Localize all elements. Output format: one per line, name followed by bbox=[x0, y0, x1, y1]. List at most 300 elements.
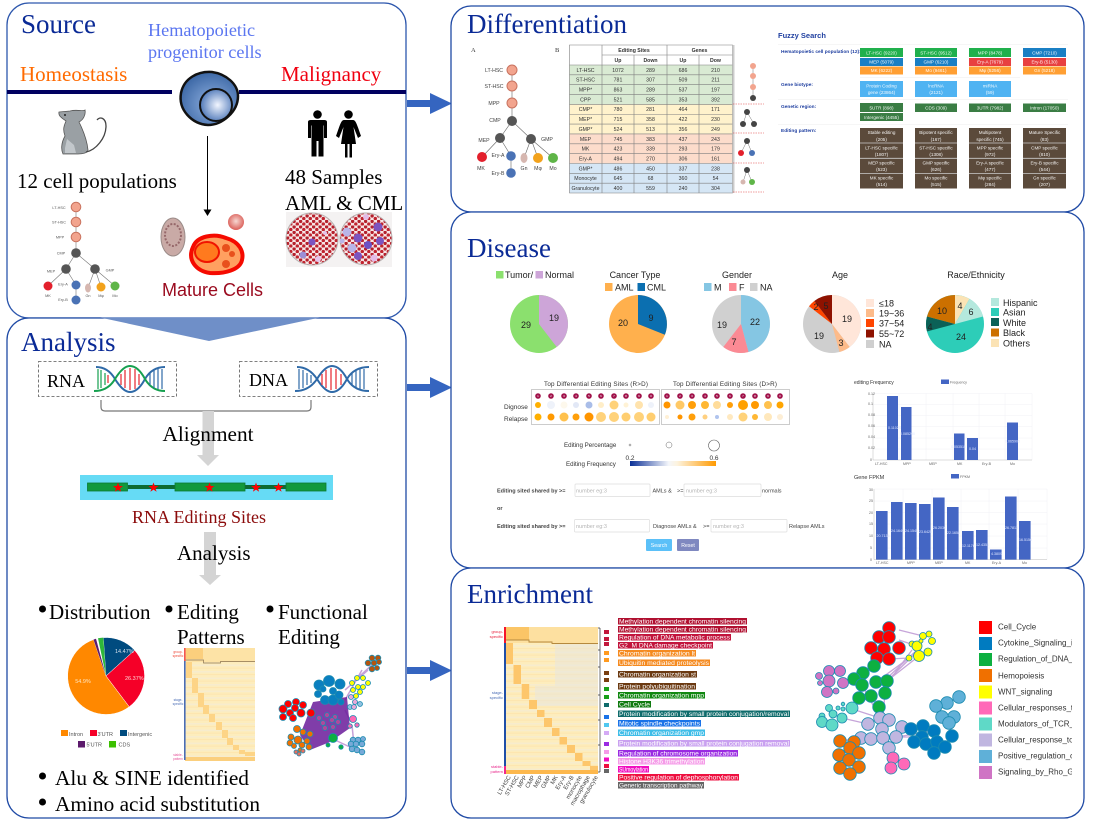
table: editing sites and genes: 509 bbox=[679, 78, 687, 84]
table: editing sites and genes: LT-HSC bbox=[576, 68, 595, 74]
diagram: cell tree: MK bbox=[45, 294, 51, 298]
table: editing sites and genes: CMP* bbox=[579, 107, 592, 113]
diagram: differentiation tree: Ery-A bbox=[492, 153, 505, 159]
chart: editing frequency bars: MEP bbox=[929, 462, 937, 466]
chart: editing frequency bars: 0.11028 bbox=[888, 426, 901, 430]
table: editing sites and genes: 293 bbox=[679, 147, 687, 153]
bracket: merge RNA and DNA bbox=[101, 400, 311, 411]
table: editing sites and genes: 715 bbox=[614, 117, 622, 123]
site number markers: 0 bbox=[650, 394, 652, 398]
table: editing sites and genes: CPP bbox=[580, 97, 591, 103]
table: editing sites and genes: 281 bbox=[646, 107, 655, 113]
table: editing sites and genes: MEP* bbox=[579, 117, 592, 123]
chart: editing pattern heatmap: pattern bbox=[173, 757, 183, 761]
table: editing sites and genes: 400 bbox=[614, 186, 622, 192]
chart: editing frequency bars bbox=[854, 380, 1032, 466]
buttons: cell population bbox=[860, 48, 1066, 74]
diagram: differentiation tree: GMP bbox=[541, 137, 553, 143]
label: hematopoietic progenitor cells: Hematopoietic bbox=[148, 20, 255, 40]
axis labels: cell populations: monocyte bbox=[566, 774, 584, 801]
arrow: to enrichment bbox=[407, 660, 452, 681]
table: editing sites and genes: 179 bbox=[711, 147, 720, 153]
chart: top differential editing sites bubbles: Top Differential Editing Sites (D>R) bbox=[673, 381, 777, 388]
enriched term labels: Cell Cycle bbox=[619, 702, 651, 709]
diagram: lineage mini trees bbox=[733, 63, 764, 192]
chart: gene FPKM bars: 30 bbox=[869, 488, 873, 492]
table: editing sites and genes: 356 bbox=[679, 127, 687, 133]
box: DNA bbox=[240, 362, 378, 396]
site number markers: 0 bbox=[779, 394, 781, 398]
panel: differentiation bbox=[451, 6, 1084, 212]
legend: gender: F bbox=[739, 282, 745, 292]
buttons: editing pattern: (626) bbox=[931, 167, 942, 172]
chart: gene FPKM bars: 25 bbox=[869, 499, 873, 503]
icon: blood smears bbox=[286, 212, 392, 267]
chart: gene FPKM bars: 5 bbox=[870, 546, 872, 550]
buttons: editing pattern: (810) bbox=[1039, 152, 1050, 157]
chart: tumor normal pie bbox=[510, 295, 568, 353]
table: editing sites and genes: Dow bbox=[710, 58, 722, 64]
axis labels: cell populations: macrophage bbox=[570, 774, 592, 807]
diagram: cell tree: GMP bbox=[106, 268, 115, 272]
section: fuzzy search: Gene biotype: bbox=[781, 82, 813, 88]
diagram: cell tree: Ery-A bbox=[58, 282, 68, 286]
axis labels: cell populations: ST-HSC bbox=[505, 774, 521, 797]
legend: cancer type bbox=[605, 270, 666, 292]
table: editing sites and genes: 353 bbox=[679, 97, 687, 103]
buttons: editing pattern: (544) bbox=[1039, 167, 1050, 172]
buttons: gene biotype: lncRNA bbox=[928, 84, 945, 88]
chart: gender pie: 7 bbox=[731, 337, 737, 347]
buttons: gene biotype: gene (23864) bbox=[868, 90, 896, 95]
enriched term labels: Protein polyubiquitination bbox=[619, 684, 696, 691]
buttons: cell population: MK (6222) bbox=[871, 68, 893, 73]
label: A: A bbox=[471, 47, 476, 54]
site number markers: 7 bbox=[613, 394, 615, 398]
legend: race ethnicity: Race/Ethnicity bbox=[947, 270, 1005, 280]
form: shared editing sites filter: Editing sited shared by >= bbox=[497, 488, 565, 494]
table: editing sites and genes: 54 bbox=[713, 176, 718, 182]
arrow: analysis bbox=[199, 532, 221, 585]
table: editing sites and genes: 513 bbox=[646, 127, 655, 133]
label: malignancy: Malignancy bbox=[281, 62, 382, 86]
enriched term labels: Methylation dependent chromatin silencing bbox=[619, 627, 747, 634]
buttons: gene biotype: miRNA bbox=[983, 84, 998, 88]
site number markers: 4 bbox=[704, 394, 706, 398]
buttons: genetic region: CDS (309) bbox=[925, 106, 947, 110]
chart: gene FPKM bars: FPKM bbox=[960, 475, 970, 479]
buttons: cell population: ST-HSC (9512) bbox=[920, 50, 952, 56]
enriched term labels bbox=[618, 618, 790, 790]
divider: timeline right bbox=[239, 90, 406, 94]
table: editing sites and genes: Editing Sites bbox=[618, 48, 650, 54]
panel: disease bbox=[451, 212, 1084, 568]
chart: gene FPKM bars: 12.1176 bbox=[962, 544, 975, 548]
icon: mouse bbox=[59, 110, 106, 154]
chart: genomic distribution pie: 26.37% bbox=[125, 676, 144, 682]
chart: gene FPKM bars: Mo bbox=[1022, 561, 1027, 565]
form: shared editing sites filter: Relapse AMLs bbox=[789, 524, 825, 530]
diagram: cell tree: CMP bbox=[57, 252, 66, 256]
chart: gene FPKM bars bbox=[854, 474, 1047, 565]
buttons: cell population: Mφ (5256) bbox=[979, 68, 1001, 73]
chart: gene FPKM bars: MPP bbox=[907, 561, 915, 565]
legend: cancer type: AML bbox=[615, 282, 634, 292]
table: editing sites and genes: 486 bbox=[614, 166, 622, 172]
buttons: editing pattern: (284) bbox=[985, 182, 996, 187]
chart: cancer type pie bbox=[609, 295, 667, 353]
legend: editing percentage and frequency: 0.2 bbox=[625, 455, 635, 462]
buttons: editing pattern: (477) bbox=[985, 167, 996, 172]
chart: editing frequency bars: Frequency bbox=[950, 380, 967, 384]
enriched term labels: Positive regulation of dephosphorylation bbox=[619, 775, 739, 782]
chart: gene FPKM bars: 23.6425 bbox=[919, 530, 932, 534]
chart: gene FPKM bars: Ery-A bbox=[992, 561, 1002, 565]
table: editing sites and genes: 780 bbox=[614, 107, 622, 113]
buttons: editing pattern: Gn specific bbox=[1033, 176, 1057, 180]
chart: gene FPKM bars: Gene FPKM bbox=[854, 475, 885, 481]
buttons: genetic region: Intergenic (4455) bbox=[864, 115, 899, 120]
site number markers: 8 bbox=[754, 394, 756, 398]
chart: editing frequency bars: 0.02 bbox=[868, 446, 875, 450]
site number markers: 4 bbox=[575, 394, 577, 398]
table: editing sites and genes: 645 bbox=[614, 176, 622, 182]
legend: editing percentage and frequency: Editing Percentage bbox=[564, 442, 617, 449]
icon: mature cells bbox=[161, 214, 244, 273]
chart: editing frequency bars: 0.04 bbox=[868, 435, 875, 439]
panel: source bbox=[7, 3, 406, 318]
chart: gene FPKM bars: 20 bbox=[869, 511, 873, 515]
chart: enrichment heatmap: group- bbox=[491, 629, 504, 634]
chart: editing frequency bars: 0.12 bbox=[868, 392, 875, 396]
buttons: editing pattern: (205) bbox=[876, 137, 887, 142]
legend: network clusters bbox=[979, 621, 1072, 779]
site number markers: 6 bbox=[729, 394, 731, 398]
enriched term labels: Regulation of chromosome organization bbox=[619, 751, 738, 758]
chart: top differential editing sites bubbles: Dignose bbox=[504, 404, 528, 411]
buttons: cell population: Ery-A (7679) bbox=[977, 60, 1003, 65]
buttons: genetic region: 3UTR (7982) bbox=[977, 106, 1004, 110]
chart: editing frequency bars: 0 bbox=[870, 458, 872, 462]
table: editing sites and genes: Up bbox=[615, 58, 621, 64]
table: editing sites and genes: Ery-A bbox=[579, 156, 593, 162]
table: editing sites and genes: 1072 bbox=[612, 68, 624, 74]
table: editing sites and genes: 464 bbox=[679, 107, 687, 113]
diagram: differentiation tree: CMP bbox=[489, 118, 501, 124]
table: editing sites and genes: 360 bbox=[679, 176, 687, 182]
site number markers: 9 bbox=[767, 394, 769, 398]
diagram: cell tree: Gn bbox=[85, 294, 91, 298]
enriched term labels: G2_M DNA damage checkpoint bbox=[619, 643, 712, 650]
chart: race ethnicity pie: 4 bbox=[927, 322, 933, 332]
form: shared editing sites filter: Editing sited shared by >= bbox=[497, 524, 565, 530]
label: alignment: Alignment bbox=[162, 422, 254, 446]
buttons: editing pattern: (83) bbox=[1040, 137, 1049, 142]
heading: disease: Disease bbox=[467, 233, 551, 263]
table: editing sites and genes: Granulocyte bbox=[572, 186, 600, 192]
heading: source: Source bbox=[21, 9, 96, 39]
legend: network clusters: Cell_Cycle bbox=[998, 622, 1037, 632]
item: distribution: Distribution bbox=[49, 600, 151, 624]
axis labels: cell populations: MPP bbox=[517, 775, 529, 789]
buttons: editing pattern: (167) bbox=[931, 137, 942, 142]
heading: analysis: Analysis bbox=[21, 327, 116, 357]
heading: differentiation: Differentiation bbox=[467, 9, 627, 39]
table: editing sites and genes: 383 bbox=[646, 137, 655, 143]
enriched term labels: Chromatin organization mpp bbox=[619, 693, 705, 700]
chart: editing frequency bars: 0.065905 bbox=[1005, 440, 1020, 444]
legend: age: NA bbox=[879, 340, 892, 350]
table: editing sites and genes: 304 bbox=[711, 186, 720, 192]
diagram: differentiation tree: MEP bbox=[478, 138, 490, 144]
legend: genomic regions bbox=[61, 730, 152, 748]
legend: genomic regions: 5'UTR bbox=[86, 742, 102, 748]
chart: editing pattern heatmap: group- bbox=[173, 650, 183, 654]
table: editing sites and genes: 494 bbox=[614, 156, 622, 162]
table: editing sites and genes: 781 bbox=[614, 78, 622, 84]
legend: race ethnicity bbox=[947, 270, 1038, 348]
chart: gene FPKM bars: 0 bbox=[870, 558, 872, 562]
chart: cancer type pie: 20 bbox=[618, 318, 628, 328]
site number markers: 2 bbox=[679, 394, 681, 398]
buttons: editing pattern: MPP specific bbox=[977, 146, 1004, 150]
table: editing sites and genes: MEP bbox=[580, 137, 592, 143]
legend: tumor normal bbox=[496, 270, 574, 280]
site number markers: 3 bbox=[691, 394, 693, 398]
legend: genomic regions: Intron bbox=[69, 732, 83, 738]
diagram: cell tree: Ery-B bbox=[58, 298, 68, 302]
chart: editing frequency bars: Ery-B bbox=[982, 462, 992, 466]
chart: editing frequency bars: 0.08 bbox=[868, 413, 875, 417]
table: editing sites and genes: 307 bbox=[646, 78, 655, 84]
table: editing sites and genes: 392 bbox=[711, 97, 720, 103]
site number markers bbox=[535, 393, 783, 399]
legend: tumor normal: Tumor/ bbox=[505, 270, 534, 280]
chart: age pie: 19 bbox=[842, 314, 852, 324]
legend: editing percentage and frequency: Editing Frequency bbox=[566, 461, 617, 468]
legend: genomic regions: CDS bbox=[118, 742, 130, 748]
enriched term labels: SUmoylation bbox=[619, 767, 648, 774]
axis labels: cell populations: CMP bbox=[525, 775, 537, 790]
form: shared editing sites filter: or bbox=[497, 506, 503, 512]
site number markers: 1 bbox=[666, 394, 668, 398]
legend: editing percentage and frequency: 0.6 bbox=[709, 455, 719, 462]
legend: race ethnicity: Hispanic bbox=[1003, 298, 1038, 308]
chart: enrichment heatmap: specific bbox=[490, 634, 503, 639]
heading: enrichment: Enrichment bbox=[467, 579, 593, 609]
axis labels: cell populations: MEP bbox=[533, 775, 545, 789]
diagram: cell tree: MEP bbox=[47, 270, 56, 274]
form: shared editing sites filter: AMLs & bbox=[652, 488, 672, 494]
enriched term labels: Chromatin organization lt bbox=[619, 651, 695, 658]
chart: functional network small bbox=[279, 655, 382, 756]
item: Alu and SINE: Alu & SINE identified bbox=[55, 766, 249, 790]
box: RNA bbox=[38, 362, 176, 396]
chart: enrichment network bbox=[816, 622, 965, 780]
diagram: differentiation tree bbox=[477, 65, 558, 178]
enriched term labels: Protein modification by small protein conjugation/removal bbox=[619, 711, 789, 718]
chart: gene FPKM bars: 24.1545 bbox=[905, 529, 918, 533]
chart: cancer type pie: 9 bbox=[648, 313, 654, 323]
chart: editing frequency bars: Mo bbox=[1010, 462, 1015, 466]
icon: progenitor cell bbox=[181, 72, 238, 125]
buttons: editing pattern: (1308) bbox=[929, 152, 943, 157]
form: shared editing sites filter: >= bbox=[677, 488, 683, 494]
chart: race ethnicity pie: 10 bbox=[937, 306, 947, 316]
buttons: cell population: Mo (9461) bbox=[926, 68, 947, 73]
chart: editing pattern heatmap: specific bbox=[173, 702, 184, 706]
chart: genomic distribution pie: 54.9% bbox=[75, 679, 91, 685]
item: editing patterns: Patterns bbox=[177, 625, 245, 649]
form: shared editing sites filter: number eg:3 bbox=[576, 488, 607, 494]
chart: tumor normal pie: 29 bbox=[521, 320, 531, 330]
buttons: cell population: MPP (8478) bbox=[978, 50, 1003, 56]
section: fuzzy search: Fuzzy Search bbox=[778, 31, 826, 40]
chart: gene FPKM bars: MK bbox=[965, 561, 971, 565]
table: editing sites and genes: ST-HSC bbox=[576, 78, 595, 84]
buttons: gene biotype: (59) bbox=[986, 90, 995, 95]
label: B: B bbox=[555, 47, 560, 54]
chart: genomic distribution pie: 14.47% bbox=[115, 649, 134, 655]
section: fuzzy search: Editing pattern: bbox=[781, 128, 817, 134]
diagram: differentiation tree: MPP bbox=[488, 101, 500, 107]
table: editing sites and genes: 358 bbox=[646, 117, 655, 123]
buttons: cell population: Ery-B (5130) bbox=[1031, 60, 1058, 65]
chart: editing frequency bars: 0.06 bbox=[868, 424, 875, 428]
connector: source to analysis wedge bbox=[100, 318, 320, 341]
diagram: differentiation tree: Mo bbox=[549, 166, 557, 172]
chart: race ethnicity pie bbox=[926, 295, 984, 353]
buttons: gene biotype: (2121) bbox=[929, 90, 943, 95]
diagram: differentiation tree: Gn bbox=[521, 166, 528, 172]
chart: gene FPKM bars: 16.5156 bbox=[1019, 538, 1032, 542]
panel: analysis bbox=[7, 318, 406, 818]
table: editing sites and genes: 171 bbox=[711, 107, 720, 113]
buttons: editing pattern: (523) bbox=[876, 167, 887, 172]
button: reset: Reset bbox=[681, 543, 695, 549]
enriched term labels: Histone H3K36 trimethylation bbox=[619, 759, 705, 766]
axis labels: cell populations bbox=[497, 774, 600, 807]
label: hematopoietic progenitor cells: progenitor cells bbox=[148, 42, 262, 62]
table: editing sites and genes: 537 bbox=[679, 88, 687, 94]
item: functional editing bbox=[266, 600, 368, 649]
legend: genomic regions: 3'UTR bbox=[98, 732, 113, 738]
buttons: cell population: Gn (5218) bbox=[1034, 68, 1055, 73]
table: editing sites and genes: 289 bbox=[646, 88, 655, 94]
form: shared editing sites filter: >= bbox=[703, 524, 709, 530]
legend: editing percentage and frequency bbox=[564, 440, 720, 468]
cluster markers bbox=[598, 628, 609, 773]
enriched term labels: Mitotic spindle checkpoints bbox=[619, 721, 700, 728]
diagram: differentiation tree: MK bbox=[477, 166, 485, 172]
chart: enrichment heatmap: specific bbox=[490, 695, 503, 700]
diagram: cell tree: LT-HSC bbox=[52, 206, 66, 210]
diagram: differentiation tree: ST-HSC bbox=[484, 84, 504, 90]
table: editing sites and genes: 243 bbox=[711, 137, 720, 143]
legend: age: 37~54 bbox=[879, 318, 904, 328]
legend: tumor normal: Normal bbox=[545, 270, 574, 280]
table: editing sites and genes: Monocyte bbox=[574, 176, 597, 182]
table: editing sites and genes: GMP* bbox=[579, 127, 592, 133]
buttons: editing pattern bbox=[860, 128, 1066, 188]
label: 12 cell populations: 12 cell populations bbox=[17, 169, 177, 193]
chart: age pie: 5 bbox=[823, 301, 829, 311]
form: shared editing sites filter: number eg:3 bbox=[713, 524, 744, 530]
buttons: editing pattern: CMP specific bbox=[1031, 146, 1059, 150]
chart: age pie: 3 bbox=[838, 338, 844, 348]
buttons: genetic region: Intron (17050) bbox=[1030, 106, 1059, 110]
form: shared editing sites filter: Diagnose AMLs & bbox=[653, 524, 697, 530]
section: fuzzy search bbox=[778, 31, 1068, 188]
table: editing sites and genes: 521 bbox=[614, 97, 622, 103]
chart: editing frequency bars: MK bbox=[957, 462, 963, 466]
box: RNA: RNA bbox=[47, 371, 85, 391]
buttons: editing pattern: Mφ specific bbox=[978, 176, 1002, 180]
site number markers: 2 bbox=[550, 394, 552, 398]
table: editing sites and genes: 559 bbox=[646, 186, 655, 192]
table: editing sites and genes: 524 bbox=[614, 127, 622, 133]
buttons: editing pattern: GMP specific bbox=[923, 160, 950, 166]
legend: gender: M bbox=[714, 282, 722, 292]
arrow: alignment bbox=[197, 411, 219, 466]
legend: network clusters: WNT_signaling bbox=[998, 688, 1052, 696]
buttons: cell population: LT-HSC (9220) bbox=[866, 50, 897, 56]
table: editing sites and genes: 339 bbox=[646, 147, 655, 153]
legend: genomic regions: Intergenic bbox=[128, 732, 152, 738]
chart: enrichment heatmap bbox=[490, 627, 598, 774]
table: editing sites and genes: 863 bbox=[614, 88, 622, 94]
table: editing sites and genes: 161 bbox=[711, 156, 720, 162]
chart: editing frequency bars: MPP bbox=[903, 462, 911, 466]
box: DNA: DNA bbox=[249, 370, 288, 390]
legend: race ethnicity: White bbox=[1003, 318, 1026, 328]
buttons: editing pattern: MEP specific bbox=[868, 160, 895, 166]
chart: gene FPKM bars: 10 bbox=[869, 534, 873, 538]
site number markers: 9 bbox=[638, 394, 640, 398]
buttons: genetic region bbox=[860, 103, 1066, 121]
chart: age pie: 2 bbox=[813, 302, 819, 312]
buttons: editing pattern: Ery-A specific bbox=[976, 160, 1005, 166]
legend: network clusters: Cellular_response_to_DNA bbox=[998, 736, 1093, 744]
enriched term labels: Methylation dependent chromatin silencing bbox=[619, 619, 747, 626]
diagram: cell tree: Mo bbox=[112, 294, 118, 298]
arrow: to differentiation bbox=[407, 93, 452, 114]
legend: age: 19~36 bbox=[879, 308, 904, 318]
enriched term labels: Regulation of DNA metabolic process bbox=[619, 635, 730, 642]
chart: genomic distribution pie bbox=[68, 638, 145, 714]
form: shared editing sites filter: number eg:3 bbox=[576, 524, 607, 530]
chart: gene FPKM bars: 12.4351 bbox=[976, 543, 989, 547]
form: shared editing sites filter: normals bbox=[762, 488, 782, 494]
table: editing sites and genes: 422 bbox=[679, 117, 687, 123]
buttons: editing pattern: Mo specific bbox=[925, 176, 948, 180]
chart: top differential editing sites bubbles: Relapse bbox=[504, 416, 528, 423]
chart: gene FPKM bars: MEP bbox=[935, 561, 943, 565]
table: editing sites and genes: 437 bbox=[679, 137, 687, 143]
table: editing sites and genes: 306 bbox=[679, 156, 687, 162]
table: editing sites and genes: 289 bbox=[646, 68, 655, 74]
table: editing sites and genes: Down bbox=[643, 58, 658, 64]
diagram: differentiation tree: Ery-B bbox=[492, 171, 505, 177]
label: homeostasis: Homeostasis bbox=[20, 62, 127, 86]
item: editing patterns: Editing bbox=[177, 600, 239, 624]
legend: age: Age bbox=[832, 270, 848, 280]
legend: age: 55~72 bbox=[879, 329, 904, 339]
axis labels: cell populations: Ery-A bbox=[555, 775, 568, 791]
chart: editing frequency bars: 0.04 bbox=[969, 447, 976, 451]
table: editing sites and genes: 211 bbox=[711, 78, 720, 84]
button: reset bbox=[677, 539, 699, 551]
